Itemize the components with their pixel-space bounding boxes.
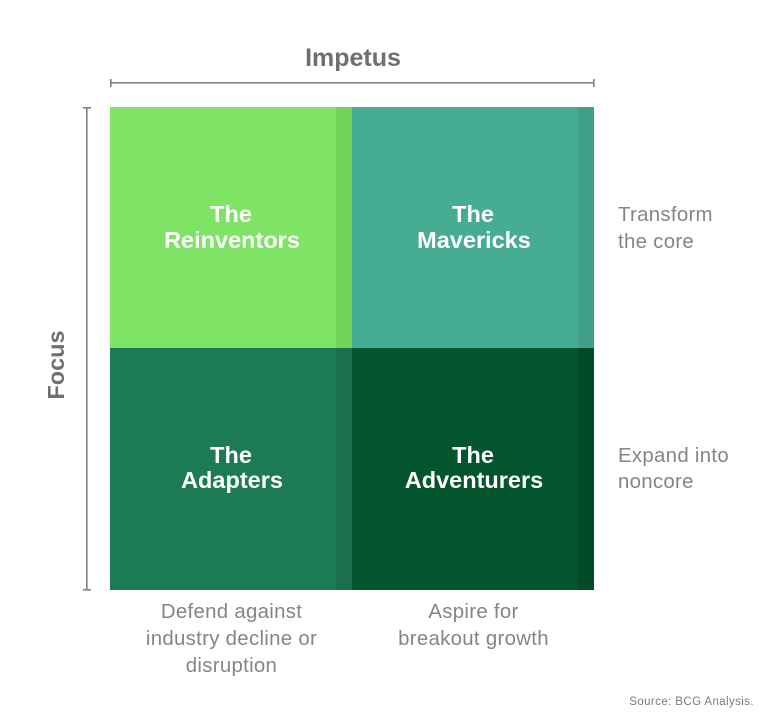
vertical axis bracket [83,107,91,591]
quadrant: The Adventurers: The [452,442,494,468]
quadrant: The Reinventors: The [210,201,252,227]
column label: Aspire for breakout growth [398,601,549,650]
row label: Transform the core: the core [618,231,694,253]
horizontal axis bracket [110,79,595,87]
column label: Defend against industry decline or disruption [146,601,317,677]
column label: Defend against industry decline or disruption: Defend against [161,601,302,623]
row label: Expand into noncore: noncore [618,471,694,493]
column label: Aspire for breakout growth: breakout growth [398,628,549,650]
column label: Aspire for breakout growth: Aspire for [428,601,519,623]
quadrant: The Reinventors [110,107,352,348]
source note: Source: BCG Analysis. [629,696,754,708]
row label: Expand into noncore [618,445,729,493]
heading: Impetus: Impetus [305,44,401,72]
quadrant: The Adapters [110,348,352,590]
quadrant: The Reinventors: Reinventors [164,227,300,253]
column label: Defend against industry decline or disruption: disruption [186,655,277,677]
quadrant: The Mavericks: The [452,201,494,227]
row label: Transform the core: Transform [618,204,713,226]
quadrant: The Mavericks: Mavericks [417,227,531,253]
quadrant: The Adapters: Adapters [181,467,283,493]
quadrant: The Adventurers: Adventurers [405,467,543,493]
quadrant: The Adventurers [352,348,594,590]
heading: Focus: Focus [43,330,69,400]
column label: Defend against industry decline or disruption: industry decline or [146,628,317,650]
row label: Expand into noncore: Expand into [618,445,729,467]
row label: Transform the core [618,204,713,253]
quadrant: The Adapters: The [210,442,252,468]
quadrant: The Mavericks [352,107,594,348]
